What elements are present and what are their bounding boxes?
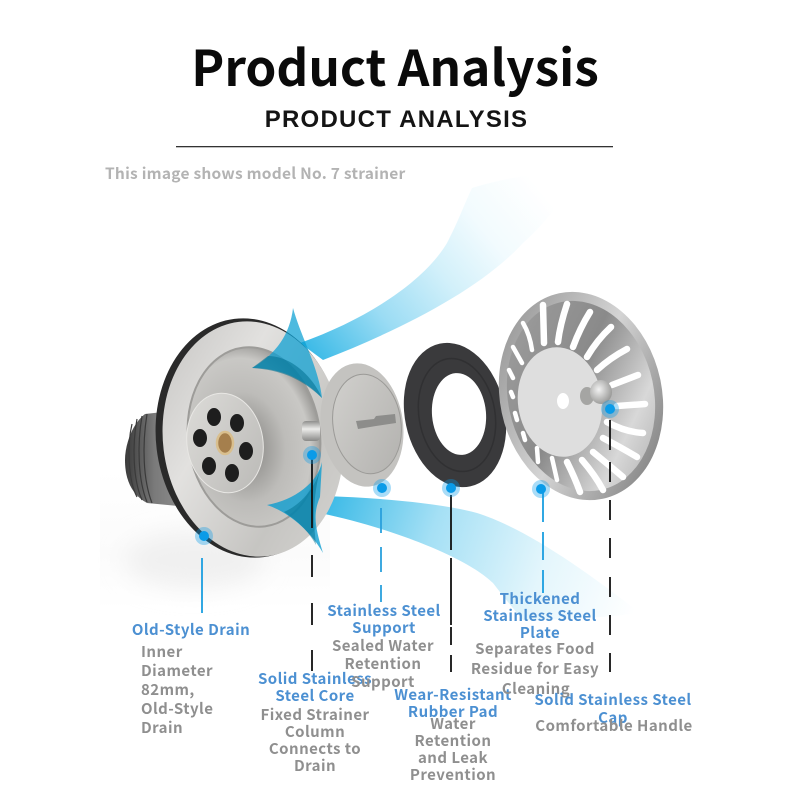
screw (356, 414, 396, 429)
arrow: upper swoosh tail (300, 170, 583, 360)
callout: stainless steel support: Stainless Steel (327, 600, 441, 621)
callout: solid stainless steel core: Connects to (269, 738, 361, 759)
callout: old-style drain: Diameter (141, 660, 213, 681)
black rubber seal (142, 308, 356, 568)
dot: steel core (303, 446, 321, 464)
arrow: lower head (267, 462, 323, 553)
callout: stainless steel support: Sealed Water (332, 635, 434, 656)
callout: old-style drain: 82mm, (141, 679, 195, 700)
connector lines (202, 420, 610, 672)
icon: strainer plate (480, 276, 682, 516)
thread ridges (129, 414, 152, 503)
head body (252, 308, 322, 398)
callout: stainless steel support (327, 600, 441, 692)
plate holes (193, 408, 253, 482)
line: cap (609, 420, 611, 672)
arrow: upper head (252, 308, 322, 398)
callout: old-style drain: Old-Style (141, 698, 213, 719)
dot: old-style drain (195, 527, 213, 545)
bowl (178, 340, 330, 534)
callout: wear-resistant rubber pad: and Leak (418, 747, 488, 768)
callout: old-style drain (132, 619, 250, 738)
callout: solid stainless steel cap (534, 689, 693, 736)
head body (267, 462, 323, 553)
callout: wear-resistant rubber pad (394, 684, 512, 785)
callout: solid stainless steel core: Drain (294, 755, 336, 776)
knob (590, 380, 612, 404)
callout: stainless steel support: Retention (345, 653, 421, 674)
line: rubber pad (450, 495, 452, 672)
dot: plate (532, 480, 550, 498)
icon: stainless support cap (313, 358, 411, 492)
callout: thickened plate: Separates Food (475, 638, 595, 659)
centre disc (511, 342, 609, 462)
callout: wear-resistant rubber pad: Prevention (410, 764, 496, 785)
outer rim (480, 276, 682, 516)
callout: stainless steel support: Support (351, 671, 415, 692)
inner basket (490, 287, 672, 505)
pad body (391, 333, 519, 497)
divider under heading (176, 146, 613, 147)
dot: support (373, 479, 391, 497)
photo backdrop tint (100, 470, 330, 610)
callout: solid stainless steel core: Solid Stainless (258, 668, 372, 689)
line: steel core (311, 457, 313, 671)
brass nut (217, 432, 233, 454)
callout: wear-resistant rubber pad: Rubber Pad (408, 701, 498, 722)
callout: solid stainless steel core: Fixed Strainer (260, 704, 370, 725)
dot: cap (601, 400, 619, 418)
pad opening (429, 371, 489, 457)
dark overlap (284, 470, 320, 545)
callout: solid stainless steel cap: Cap (598, 707, 628, 728)
callout: wear-resistant rubber pad: Water (430, 713, 476, 734)
icon: drain assembly (125, 308, 357, 568)
callout: thickened plate: Plate (520, 622, 560, 643)
callout: thickened plate (471, 588, 599, 699)
threaded drain body (125, 411, 178, 506)
callout: solid stainless steel cap: Comfortable Handle (535, 715, 693, 736)
centre hole (557, 393, 569, 409)
steel flange (149, 311, 357, 567)
callout: thickened plate: Residue for Easy (471, 658, 599, 679)
callout: solid stainless steel core: Column (285, 721, 345, 742)
callout: thickened plate: Thickened (500, 588, 580, 609)
callout: solid stainless steel core (258, 668, 372, 776)
callout: thickened plate: Cleaning (502, 678, 570, 699)
callout: wear-resistant rubber pad: Retention (415, 730, 491, 751)
outer disc (313, 358, 411, 492)
line: support (380, 508, 382, 602)
callout: old-style drain: Inner (141, 641, 183, 662)
icon: solid steel core pin (302, 421, 320, 441)
dark overlap (252, 356, 322, 398)
icon: rubber pad (391, 333, 519, 497)
model note: This image shows model No. 7 strainer (105, 162, 406, 184)
line: old-style drain (201, 558, 203, 613)
arrow: lower swoosh tail (320, 496, 640, 620)
callout: old-style drain: Drain (141, 717, 183, 738)
callout: stainless steel support: Support (352, 617, 416, 638)
subtitle: PRODUCT ANALYSIS (265, 106, 528, 133)
marker dots (195, 400, 619, 545)
callout: solid stainless steel core: Steel Core (275, 685, 355, 706)
slots (509, 304, 645, 492)
inner disc (326, 370, 408, 478)
callout: thickened plate: Stainless Steel (483, 605, 597, 626)
knob stem (580, 387, 594, 405)
raised ridge (410, 352, 504, 478)
line: plate (542, 490, 544, 593)
callout: solid stainless steel cap: Solid Stainless Steel (534, 689, 692, 710)
shadow under drain (125, 532, 265, 588)
callout: wear-resistant rubber pad: Wear-Resistant (394, 684, 512, 705)
title: Product Analysis (191, 29, 599, 101)
perforated plate (180, 388, 270, 498)
dot: rubber pad (442, 479, 460, 497)
callout: old-style drain: Old-Style Drain (132, 619, 250, 640)
